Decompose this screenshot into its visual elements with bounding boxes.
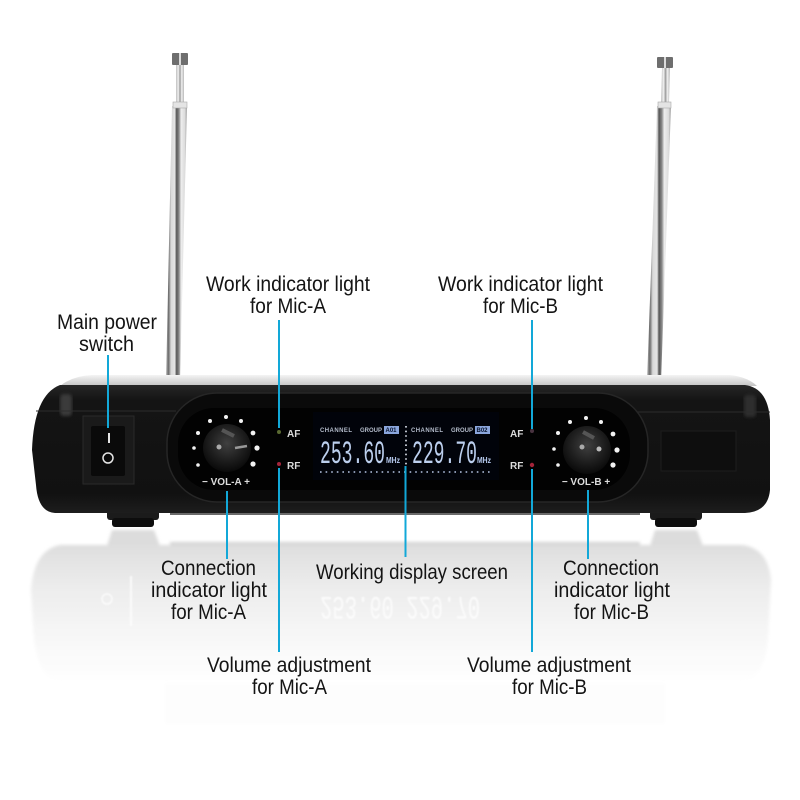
indicator lights B: [510, 429, 534, 472]
label: volume adjustment B: [467, 654, 631, 699]
leader line: volume A: [278, 468, 280, 652]
label: working display screen: Working display screen: [316, 561, 508, 584]
display screen: GROUP: [451, 428, 473, 434]
volume knob A: − VOL-A +: [202, 477, 250, 488]
volume knob B: − VOL-B +: [562, 477, 610, 488]
label: connection indicator B: Connection: [563, 557, 659, 580]
leader line: connection B: [587, 490, 589, 559]
label: main power switch: Main power: [57, 311, 157, 334]
front panel: [167, 393, 648, 502]
label: volume adjustment A: Volume adjustment: [207, 654, 371, 677]
display screen: [313, 412, 499, 480]
leader line: connection A: [226, 491, 228, 559]
label: work indicator B: for Mic-B: [483, 295, 558, 318]
label: work indicator B: Work indicator light: [438, 273, 603, 296]
reflection of receiver: 253.60 229.70: [320, 587, 480, 624]
right side window: [661, 431, 736, 471]
label: connection indicator A: indicator light: [151, 579, 267, 602]
leader line: volume B: [531, 469, 533, 652]
label: work indicator A: for Mic-A: [250, 295, 326, 318]
label: connection indicator B: [554, 557, 670, 624]
label: volume adjustment B: for Mic-B: [512, 676, 587, 699]
label: connection indicator B: indicator light: [554, 579, 670, 602]
feet: [107, 510, 702, 527]
label: connection indicator A: [151, 557, 267, 624]
display screen: B02: [476, 428, 488, 434]
label: volume adjustment A: [207, 654, 371, 699]
leader line: work light B: [531, 320, 533, 429]
label: main power switch: [57, 311, 157, 356]
label: work indicator A: Work indicator light: [206, 273, 370, 296]
display screen: CHANNEL: [320, 428, 352, 434]
left antenna: [166, 53, 188, 382]
label: work indicator A: [206, 273, 370, 318]
leader line: main power: [107, 355, 109, 428]
reflection of receiver: [31, 530, 771, 724]
icon: power rocker switch: [83, 416, 134, 484]
display screen: A01: [386, 428, 397, 434]
indicator lights B: AF: [510, 429, 523, 440]
right antenna: [647, 57, 673, 382]
indicator lights A: AF: [287, 429, 300, 440]
top surface: [60, 375, 757, 386]
label: main power switch: switch: [79, 333, 134, 356]
indicator lights A: [277, 429, 300, 472]
main body: [32, 385, 770, 513]
display screen: CHANNEL: [411, 428, 443, 434]
label: volume adjustment B: Volume adjustment: [467, 654, 631, 677]
receiver unit: [32, 375, 770, 527]
leader line: display: [404, 466, 406, 557]
label: work indicator B: [438, 273, 603, 318]
label: volume adjustment A: for Mic-A: [252, 676, 327, 699]
volume knob A: [192, 415, 260, 488]
display screen: 253.60: [320, 436, 385, 473]
indicator lights A: RF: [287, 461, 300, 472]
label: connection indicator B: for Mic-B: [574, 601, 649, 624]
display screen: 229.70: [412, 436, 477, 473]
display screen: MHz: [477, 456, 491, 465]
volume knob B: [552, 416, 620, 488]
display screen: MHz: [386, 456, 400, 465]
label: connection indicator A: for Mic-A: [171, 601, 246, 624]
display screen: GROUP: [360, 428, 382, 434]
indicator lights B: RF: [510, 461, 523, 472]
leader line: work light A: [278, 320, 280, 428]
label: connection indicator A: Connection: [161, 557, 256, 580]
